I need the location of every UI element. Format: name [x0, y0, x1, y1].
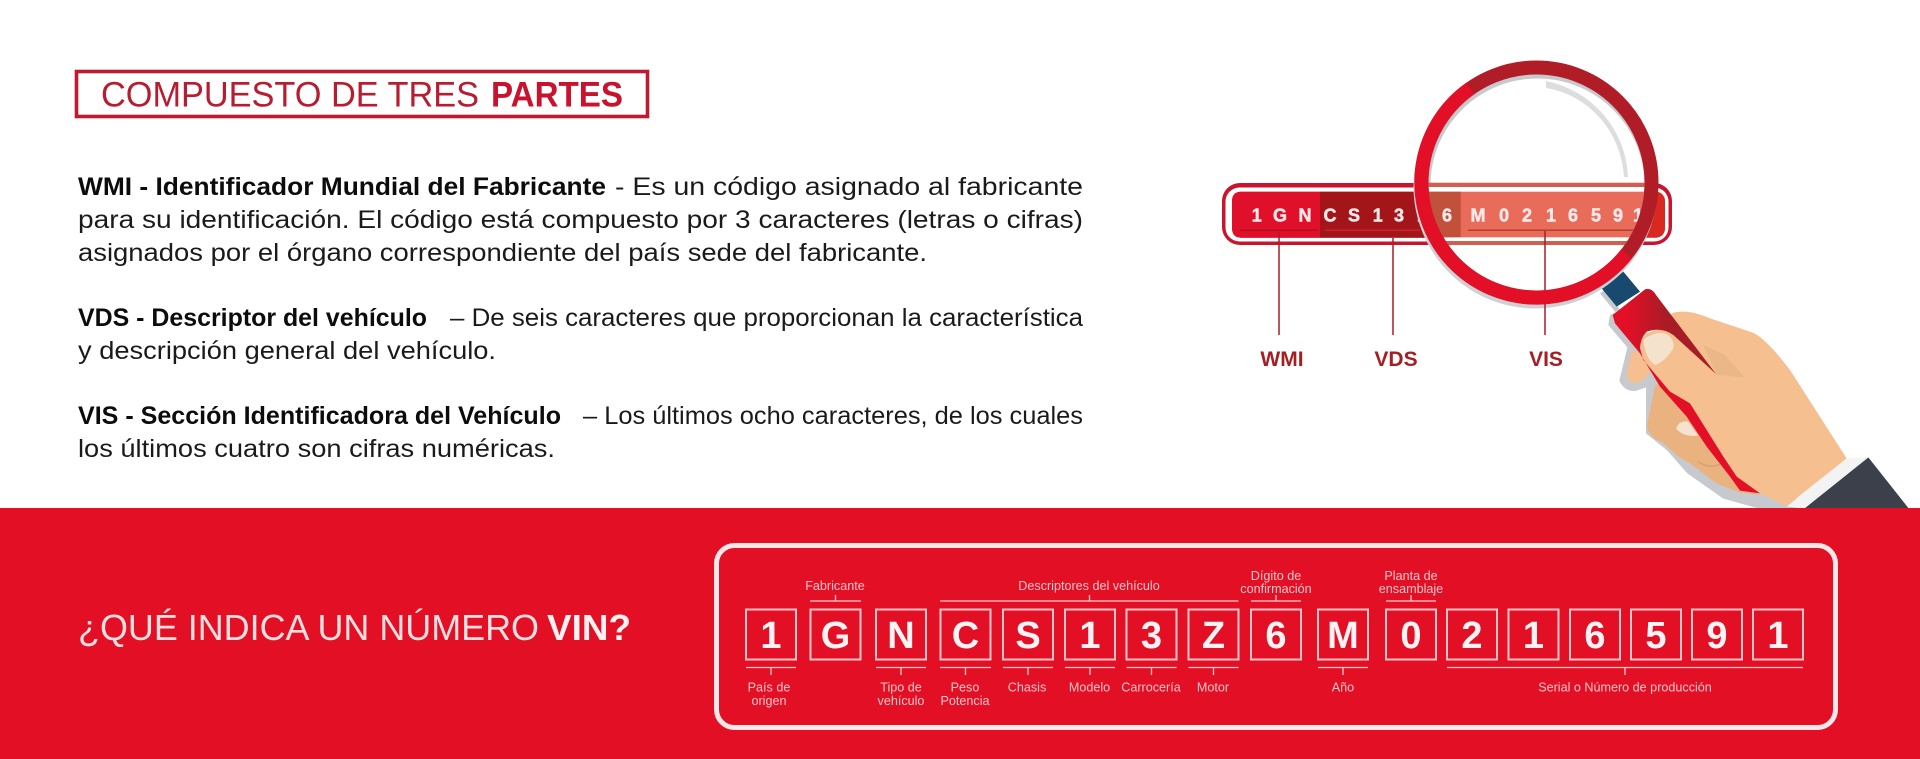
icon: finger fold line	[1698, 462, 1722, 466]
vin characters	[1252, 206, 1428, 226]
bottom labels: Carrocería	[1121, 680, 1181, 694]
bottom brackets	[746, 668, 1803, 675]
vin character boxes: M	[1327, 615, 1359, 657]
text block: WMI: - Es un código asignado al fabricante	[615, 173, 1083, 201]
bottom labels	[748, 680, 1712, 708]
text block: VDS	[78, 304, 1083, 365]
magnified bar	[1428, 78, 1644, 290]
vin character boxes: 1	[1523, 615, 1544, 657]
label: VDS: VDS	[1374, 348, 1418, 371]
vin character boxes: S	[1015, 615, 1041, 657]
bottom labels: Serial o Número de producción	[1538, 680, 1712, 694]
magnified bar: 6	[1568, 206, 1578, 226]
vin characters: 1	[1373, 206, 1383, 226]
vin characters: Z	[1418, 206, 1428, 226]
callout lines	[1279, 231, 1545, 335]
magnified bar: 9	[1613, 206, 1623, 226]
magnified bar: M	[1470, 206, 1486, 226]
vin character boxes: C	[952, 615, 979, 657]
bottom labels: Modelo	[1069, 680, 1110, 694]
icon: grip strip	[1615, 323, 1760, 493]
vin characters: S	[1348, 206, 1360, 226]
title box: PARTES	[491, 76, 623, 114]
vin character boxes: 3	[1141, 615, 1162, 657]
vin characters: G	[1273, 206, 1287, 226]
vin character boxes	[746, 610, 1803, 660]
bottom labels: País de	[748, 680, 790, 694]
bottom labels: Motor	[1197, 680, 1229, 694]
text block: WMI: WMI - Identificador Mundial del Fabricante	[78, 173, 606, 201]
icon: hand	[1640, 312, 1847, 506]
title box: COMPUESTO DE TRES	[101, 76, 479, 114]
vin bar	[1222, 183, 1672, 245]
bottom labels: Potencia	[940, 694, 990, 708]
vin characters: N	[1298, 206, 1312, 226]
text block: VDS: – De seis caracteres que proporcionan la característica	[450, 304, 1083, 332]
magnified bar: 6	[1442, 206, 1452, 226]
vin characters: 1	[1252, 206, 1262, 226]
vin character boxes: G	[821, 615, 850, 657]
vin characters: 3	[1394, 206, 1404, 226]
heading: que indica un numero vin: ¿QUÉ INDICA UN NÚMERO	[78, 607, 539, 648]
icon: handle grip	[1613, 289, 1716, 374]
title box	[76, 72, 648, 116]
vin characters: C	[1324, 206, 1336, 226]
vin character boxes: 6	[1265, 615, 1287, 657]
bottom labels: Año	[1332, 680, 1354, 694]
icon: folded fingers	[1647, 380, 1758, 495]
magnifier lens ring	[1421, 68, 1652, 298]
text block: VDS: y descripción general del vehículo.	[78, 337, 496, 365]
icon: handle collar	[1602, 272, 1640, 307]
icon: shirt cuff	[1787, 457, 1868, 508]
top labels: Dígito de	[1251, 569, 1301, 583]
top labels: Planta de	[1384, 569, 1438, 583]
red band	[0, 508, 1920, 759]
icon: hand shadow	[1600, 288, 1797, 508]
text block: VIS: VIS - Sección Identificadora del Vehículo	[78, 402, 561, 430]
top labels: Fabricante	[805, 579, 865, 593]
magnified bar: 0	[1499, 206, 1509, 226]
bottom labels: origen	[751, 694, 787, 708]
label: VIS: VIS	[1529, 348, 1563, 371]
icon: palm crease	[1703, 345, 1745, 377]
top labels: ensamblaje	[1379, 582, 1443, 596]
text block: VDS: VDS - Descriptor del vehículo	[78, 304, 427, 332]
text block: VIS	[78, 402, 1083, 463]
icon: lens glare	[1546, 81, 1628, 177]
vin character boxes: 6	[1584, 615, 1606, 657]
magnified bar: 1	[1546, 206, 1556, 226]
bottom labels: Tipo de	[880, 680, 922, 694]
text block: WMI: para su identificación. El código está compuesto por 3 caracteres (letras o cifras)	[78, 206, 1083, 234]
label: WMI: WMI	[1260, 348, 1304, 371]
text block: WMI	[78, 173, 1083, 267]
top labels: Descriptores del vehículo	[1018, 579, 1160, 593]
icon: thumb nail	[1643, 333, 1674, 365]
vin character boxes: 0	[1400, 615, 1422, 657]
vin character boxes: N	[887, 615, 915, 657]
icon: jacket sleeve	[1805, 457, 1908, 508]
bottom labels: Chasis	[1008, 680, 1046, 694]
lens drop shadow	[1414, 64, 1658, 308]
bottom labels: Peso	[951, 680, 979, 694]
illustration: hand holding magnifying glass	[1600, 272, 1908, 508]
vin character boxes: 1	[1079, 615, 1101, 657]
vin character boxes: 2	[1461, 615, 1483, 657]
top labels	[805, 569, 1443, 596]
text block: VIS: – Los últimos ocho caracteres, de los cuales	[583, 402, 1083, 430]
vin character boxes: 1	[760, 615, 782, 657]
text block: WMI: asignados por el órgano correspondiente del país sede del fabricante.	[78, 239, 927, 267]
vin character boxes: 5	[1645, 615, 1667, 657]
vin character boxes: 9	[1706, 615, 1728, 657]
text block: VIS: los últimos cuatro son cifras numéricas.	[78, 435, 555, 463]
panel: vin breakdown	[716, 546, 1836, 728]
bottom labels: vehículo	[878, 694, 924, 708]
top labels: confirmación	[1240, 582, 1312, 596]
icon: finger nail	[1676, 421, 1698, 436]
magnified bar: 5	[1591, 206, 1601, 226]
heading: que indica un numero vin: VIN?	[547, 607, 631, 648]
vin character boxes: 1	[1767, 615, 1789, 657]
magnified bar: 2	[1522, 206, 1532, 226]
icon: back finger	[1627, 350, 1650, 383]
vin character boxes: Z	[1202, 615, 1225, 657]
top brackets	[810, 595, 1436, 601]
magnified bar: 1	[1633, 206, 1643, 226]
